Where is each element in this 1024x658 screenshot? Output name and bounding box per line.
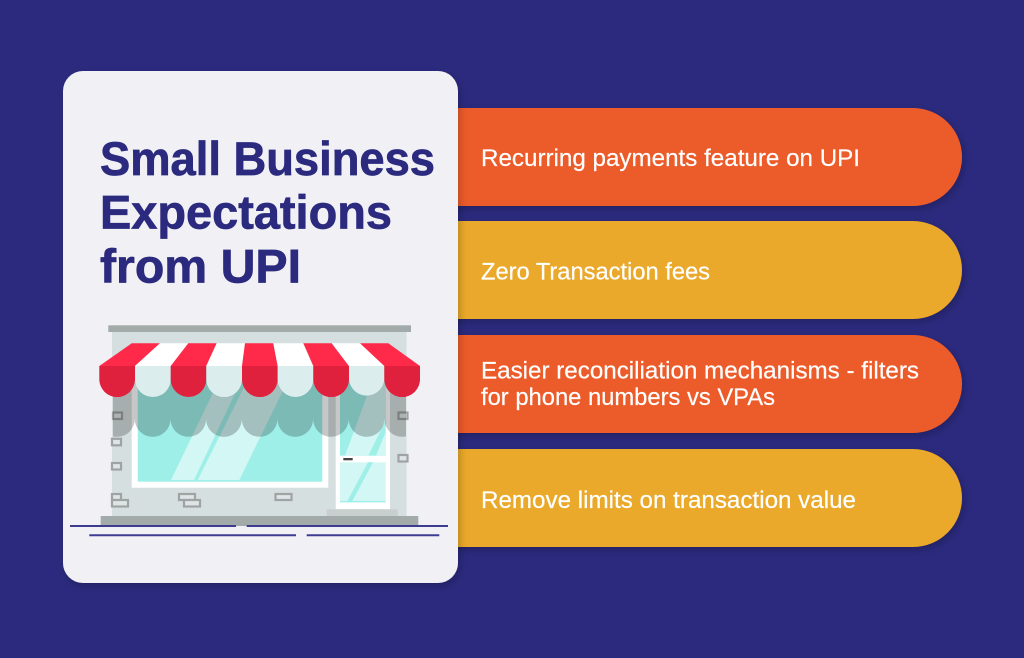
icon: storefront	[70, 325, 448, 535]
shop door	[336, 366, 390, 509]
title: Expectations	[100, 186, 392, 238]
bar text: zero transaction fees: Zero Transaction fees	[481, 258, 710, 286]
shop window	[132, 366, 328, 488]
roof ledge	[108, 325, 411, 332]
ground lines	[70, 526, 448, 535]
bar text: easier reconciliation: for phone numbers vs VPAs	[481, 384, 775, 411]
door step	[327, 509, 398, 516]
awning shadow	[99, 366, 420, 437]
panel: title card	[63, 71, 458, 583]
bar: remove limits	[440, 449, 962, 547]
title: from UPI	[100, 240, 301, 293]
bar text: easier reconciliation: Easier reconciliation mechanisms - filters	[481, 357, 919, 384]
bar: zero transaction fees	[440, 221, 962, 319]
shop wall	[112, 332, 406, 516]
title: Small Business	[100, 132, 435, 185]
bar text: remove limits: Remove limits on transaction value	[481, 487, 856, 514]
bar: recurring payments	[440, 108, 962, 206]
bar: easier reconciliation	[440, 335, 962, 433]
bar text: recurring payments: Recurring payments feature on UPI	[481, 145, 860, 172]
bricks	[112, 412, 408, 506]
title	[100, 132, 435, 293]
shop base	[101, 516, 418, 526]
infographic	[63, 71, 966, 588]
awning	[99, 343, 420, 397]
